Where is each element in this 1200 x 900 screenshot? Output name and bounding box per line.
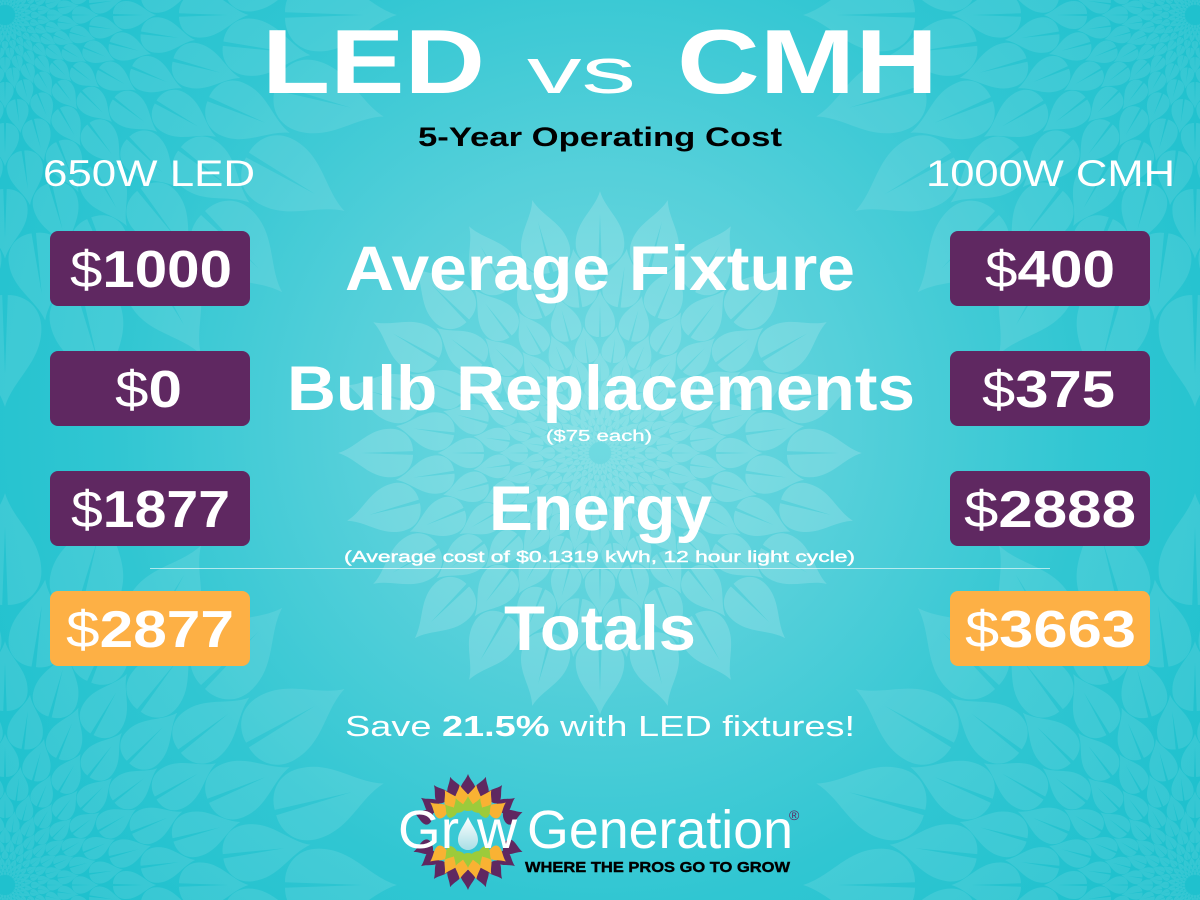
LED energy cost [50,471,250,546]
LED energy cost: $1877 [71,481,230,539]
subtitle: 5-Year Operating Cost [418,122,782,152]
CMH fixture cost: $400 [985,241,1115,299]
LED fixture cost: $1000 [70,241,232,299]
logo wordmark: Generation [527,800,793,860]
bulb label: Bulb Replacements [287,354,915,424]
LED bulb cost: $0 [115,361,182,419]
row: totals [50,591,1150,666]
savings callout: Save 21.5% with LED fixtures! [345,711,855,743]
CMH total [950,591,1150,666]
icon: water drop [458,817,478,850]
LED fixture cost [50,231,250,306]
CMH total: $3663 [965,601,1136,659]
energy label: Energy [489,474,712,544]
registered mark: ® [789,807,800,823]
LED total: $2877 [66,601,234,659]
title: LED [262,12,485,113]
title: CMH [677,12,938,113]
icon: leaf mandala [411,774,525,890]
logo wordmark: Gr [398,800,459,860]
energy note: (Average cost of $0.1319 kWh, 12 hour light cycle) [344,549,855,566]
row: average fixture [50,231,1150,306]
logo tagline: WHERE THE PROS GO TO GROW [525,859,791,876]
LED total [50,591,250,666]
logo: GrowGeneration [398,774,800,890]
fixture label: Average Fixture [345,234,855,304]
title: vs [527,35,636,107]
left column heading: 650W LED [43,153,255,194]
LED bulb cost [50,351,250,426]
logo wordmark [398,800,793,860]
totals label: Totals [504,594,696,664]
CMH bulb cost: $375 [982,361,1115,419]
bulb note: ($75 each) [546,428,652,445]
title [262,12,938,113]
row: energy [50,471,1150,566]
CMH energy cost [950,471,1150,546]
CMH fixture cost [950,231,1150,306]
row: bulb replacements [50,351,1150,445]
CMH energy cost: $2888 [964,481,1136,539]
CMH bulb cost [950,351,1150,426]
right column heading: 1000W CMH [926,153,1175,194]
logo wordmark: w [476,800,518,860]
